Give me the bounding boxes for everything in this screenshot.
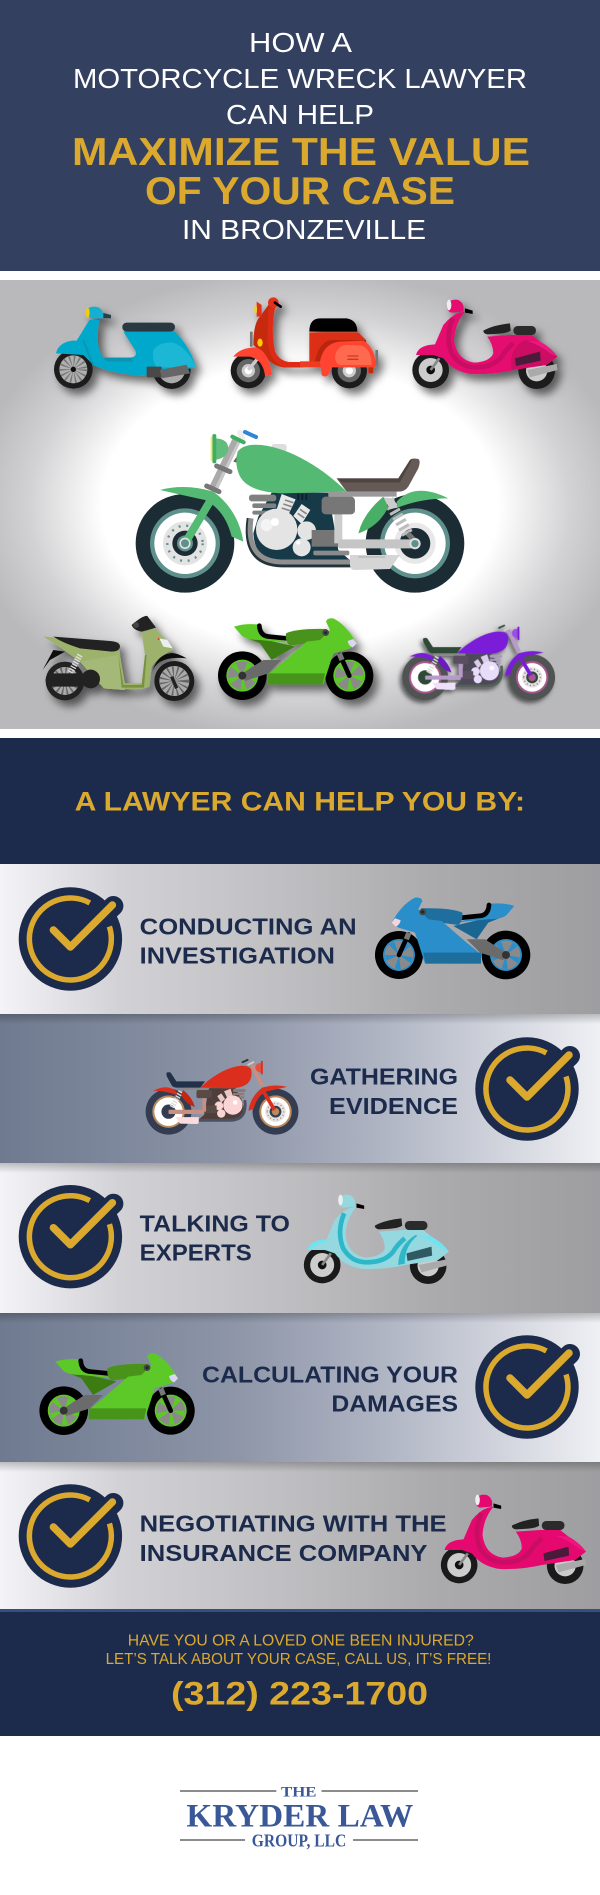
label: talking to experts: TALKING TO: [140, 1211, 290, 1237]
logo: the kryder law group: THE: [281, 1785, 316, 1801]
icon: teal scooter: [304, 1195, 449, 1284]
icon: check badge: [475, 1335, 579, 1439]
label: talking to experts: [140, 1211, 290, 1266]
label: negotiating with the insurance company: [140, 1511, 447, 1566]
phone number: (312) 223-1700: [171, 1675, 428, 1711]
icon: blue sport motorcycle: [375, 898, 530, 979]
icon: check badge: [475, 1037, 579, 1141]
label: talking to experts: EXPERTS: [140, 1240, 252, 1266]
logo: the kryder law group: GROUP, LLC: [252, 1831, 346, 1851]
icon: green sport motorcycle: [218, 618, 373, 700]
icon: olive scooter: [43, 616, 194, 701]
panel: conducting an investigation: [0, 864, 600, 1014]
label: negotiating with the insurance company: NEGOTIATING WITH THE: [140, 1511, 447, 1537]
icon: check badge: [19, 1185, 122, 1288]
label: calculating your damages: DAMAGES: [331, 1391, 458, 1417]
icon: pink scooter: [412, 300, 557, 389]
panel: lawyer help heading: [0, 738, 600, 864]
icon: large green motorcycle: [136, 432, 464, 593]
icon: check badge: [19, 1484, 122, 1588]
label: gathering evidence: [310, 1063, 458, 1119]
panel: motorcycle showcase: [0, 280, 600, 729]
panel: talking to experts: [0, 1163, 600, 1313]
text: have you or a loved one been injured: HAVE YOU OR A LOVED ONE BEEN INJURED?: [128, 1632, 474, 1649]
panel: calculating your damages: [0, 1313, 600, 1462]
heading: a lawyer can help you by: A LAWYER CAN HELP YOU BY:: [75, 787, 525, 817]
logo: the kryder law group: [180, 1785, 418, 1851]
icon: green sport motorcycle: [39, 1353, 195, 1435]
panel: gathering evidence: [0, 1014, 600, 1163]
panel: call to action: [0, 1609, 600, 1736]
icon: pink scooter: [441, 1495, 586, 1584]
label: calculating your damages: [202, 1362, 458, 1417]
label: calculating your damages: CALCULATING YOUR: [202, 1362, 458, 1388]
label: gathering evidence: GATHERING: [310, 1063, 458, 1089]
label: negotiating with the insurance company: INSURANCE COMPANY: [140, 1540, 427, 1566]
title line: in bronzeville: IN BRONZEVILLE: [182, 214, 426, 245]
icon: check badge: [19, 887, 122, 991]
logo: the kryder law group: KRYDER LAW: [186, 1799, 413, 1835]
label: gathering evidence: EVIDENCE: [329, 1093, 458, 1119]
title line: can help: CAN HELP: [226, 99, 374, 130]
label: conducting an investigation: [140, 913, 357, 969]
icon: purple motorcycle: [402, 626, 555, 700]
title line: motorcycle wreck lawyer: MOTORCYCLE WRECK LAWYER: [73, 63, 527, 94]
panel: header: [0, 0, 600, 271]
icon: red scooter: [231, 297, 378, 388]
icon: red motorcycle: [146, 1060, 298, 1135]
label: conducting an investigation: INVESTIGATION: [140, 943, 335, 969]
title highlight: maximize the value: MAXIMIZE THE VALUE: [72, 131, 530, 174]
text: let's talk about your case: LET’S TALK ABOUT YOUR CASE, CALL US, IT’S FREE!: [106, 1651, 491, 1668]
label: conducting an investigation: CONDUCTING AN: [140, 913, 357, 939]
title line: how a: HOW A: [249, 27, 352, 58]
icon: blue scooter: [54, 307, 196, 389]
panel: negotiating with the insurance company: [0, 1462, 600, 1609]
title highlight: of your case: OF YOUR CASE: [145, 170, 455, 213]
